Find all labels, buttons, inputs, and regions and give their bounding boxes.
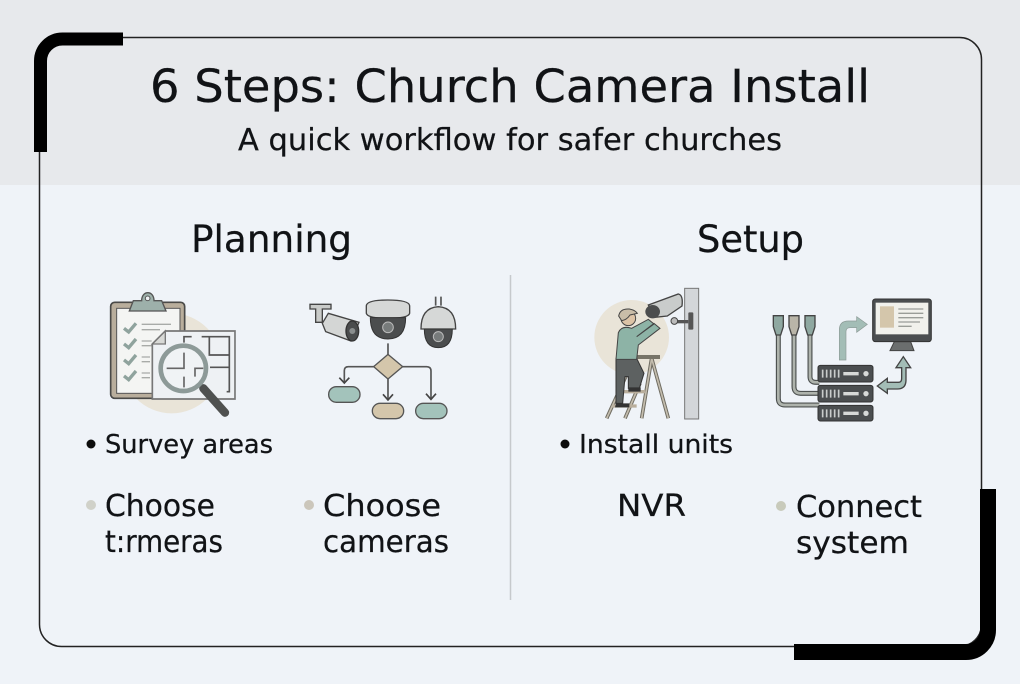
decision diamond — [374, 354, 403, 379]
server rack — [818, 365, 873, 382]
icon: clipboard checklist and floor plan with magnifier — [111, 293, 235, 413]
label: NVR: NVR — [617, 489, 686, 524]
PTZ camera — [421, 297, 456, 348]
icon: technician on ladder installing wall camera — [594, 288, 699, 419]
bullet: Choose t:rmeras — [86, 489, 223, 560]
outcome pills — [329, 387, 360, 402]
bullet: Choose cameras: cameras — [323, 525, 449, 560]
bullet: Survey areas: Survey areas — [105, 430, 273, 460]
bullet: Connect system — [776, 490, 922, 561]
bullet camera — [310, 304, 359, 341]
bullet: Choose cameras — [304, 489, 449, 560]
plugs — [773, 316, 783, 335]
subtitle: A quick workflow for safer churches — [238, 123, 782, 158]
monitor — [890, 342, 914, 351]
icon: cables, NVR server and monitor — [773, 299, 931, 421]
top-left corner bracket — [40, 39, 123, 152]
bullet: Install units: Install units — [579, 430, 733, 460]
bullet: Choose t:rmeras: t:rmeras — [105, 525, 223, 560]
title: 6 Steps: Church Camera Install — [150, 60, 870, 113]
flowchart arrows — [344, 343, 431, 400]
bullet: Choose t:rmeras: Choose — [105, 489, 215, 524]
bullet: Connect system: Connect — [796, 490, 922, 525]
bullet: Connect system: system — [796, 526, 909, 561]
bottom-right corner bracket — [794, 489, 988, 652]
upward arrow — [839, 317, 867, 360]
heading: Setup: Setup — [697, 218, 804, 261]
network cables — [778, 335, 819, 405]
double-headed arrow — [877, 357, 911, 393]
bullet: Choose cameras: Choose — [323, 489, 441, 524]
dome camera — [366, 300, 410, 339]
icon: camera types and decision flowchart — [310, 297, 456, 419]
heading: Planning: Planning — [191, 218, 352, 261]
